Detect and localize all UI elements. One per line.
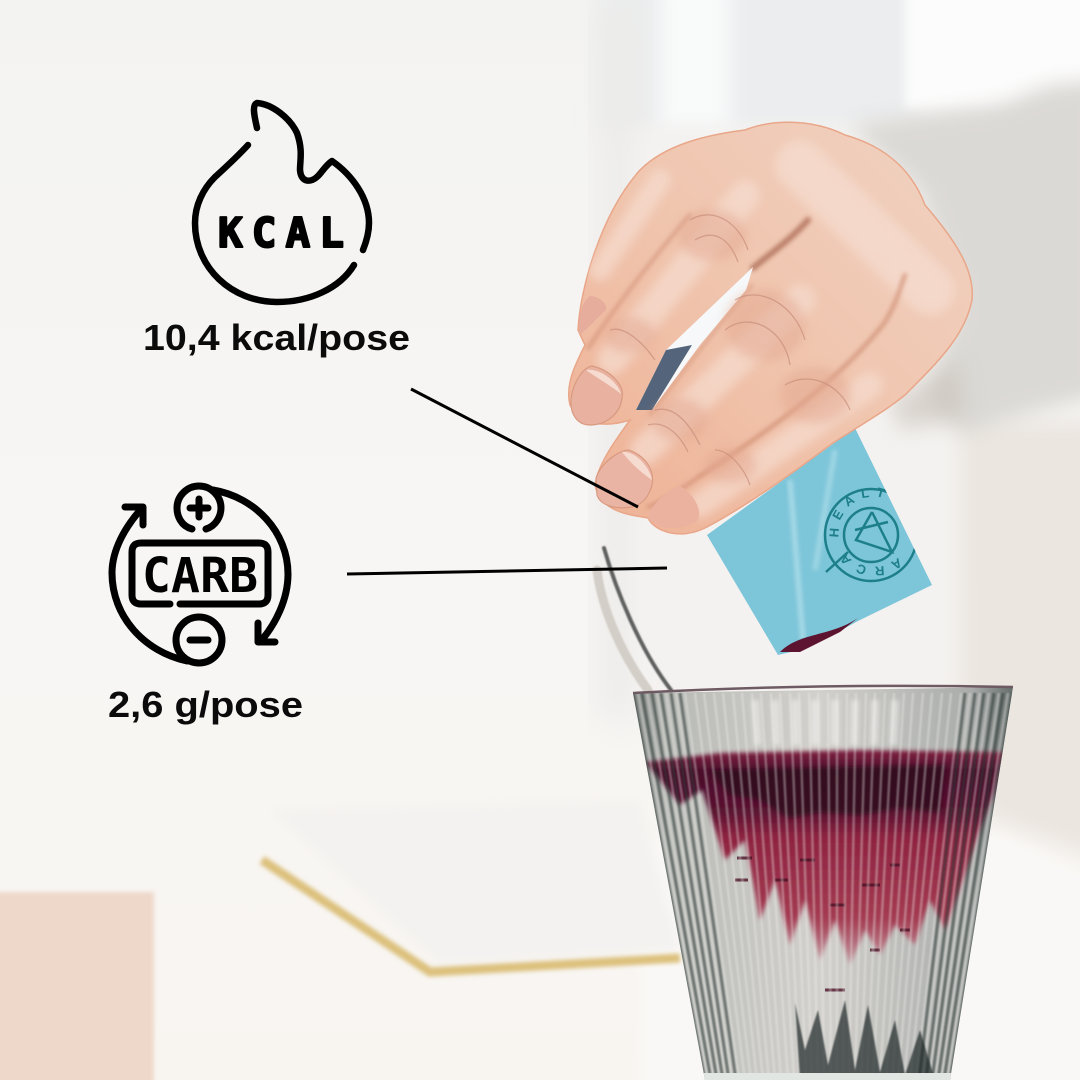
juice layer	[645, 750, 1003, 965]
shadow under hand	[890, 360, 965, 430]
dark ribs	[633, 693, 1013, 1080]
glass body	[620, 680, 1020, 1080]
logo rings	[825, 489, 917, 581]
label box	[132, 543, 268, 604]
plus circle	[177, 486, 221, 529]
nail middle	[571, 366, 622, 425]
nail index	[579, 296, 606, 335]
dark sawtooth base	[795, 1000, 935, 1080]
logo lettering: ARCA HEALTH	[829, 487, 900, 576]
glass rim	[633, 686, 1013, 693]
hand silhouette	[569, 122, 972, 534]
blurred peach box	[0, 892, 154, 1080]
icon lettering: CARB: CARB	[142, 548, 258, 604]
finger gap: white and sachet	[636, 267, 753, 410]
nail ring	[596, 450, 653, 508]
icon lettering: KCAL: KCAL	[218, 209, 344, 257]
callout line: kcal	[411, 389, 638, 507]
icon: carb cycle	[112, 486, 288, 663]
icon: kcal flame	[195, 103, 369, 302]
knuckles	[604, 209, 851, 483]
dark crease between fingers	[753, 220, 808, 268]
finger highlights	[600, 165, 930, 505]
dark juice band	[710, 765, 945, 818]
spoon	[597, 548, 671, 690]
nail little	[648, 486, 699, 528]
sachet	[707, 430, 932, 655]
grey sleeve	[850, 80, 1080, 435]
torn stain	[780, 618, 858, 652]
juice speckles	[735, 858, 910, 990]
hand	[569, 122, 972, 534]
pale base	[700, 1073, 955, 1080]
callout line: carb	[347, 568, 667, 574]
minus circle	[176, 617, 222, 663]
glass of berry drink	[620, 680, 1020, 1080]
cycle arrows	[213, 490, 288, 642]
finger separators	[588, 215, 905, 507]
label: 2,6 g/pose: 2,6 g/pose	[108, 684, 303, 725]
light ribs	[638, 693, 1008, 1080]
knuckle creases	[610, 215, 850, 485]
upper glass highlights	[755, 700, 895, 745]
inner shading	[588, 165, 930, 507]
label: 10,4 kcal/pose: 10,4 kcal/pose	[143, 317, 410, 358]
